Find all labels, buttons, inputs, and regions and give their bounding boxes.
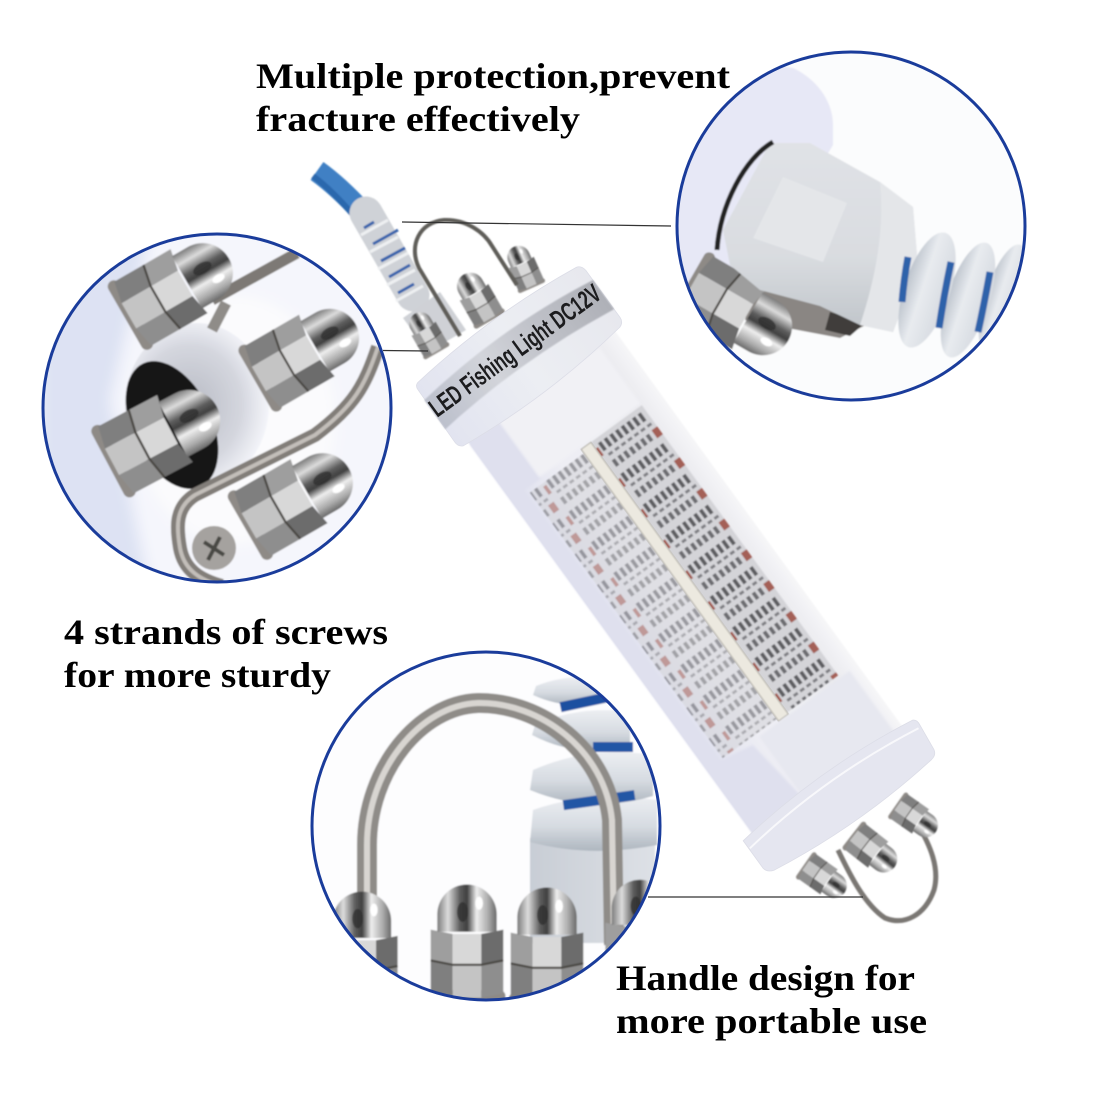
nuts bbox=[90, 242, 360, 561]
left facet bbox=[470, 407, 805, 836]
handle arch bbox=[367, 703, 614, 945]
nuts bbox=[334, 878, 648, 998]
heading: multiple protection: fracture effectively bbox=[256, 99, 580, 139]
panel: cable gland detail bbox=[660, 45, 1037, 405]
frosted lower section bbox=[759, 671, 894, 797]
icon: top handle bbox=[415, 220, 517, 336]
wire top bbox=[212, 253, 297, 330]
cap nut bbox=[688, 252, 793, 356]
leader line: screws bbox=[383, 350, 428, 352]
leader line: gland bbox=[402, 222, 671, 226]
screw head bbox=[192, 526, 236, 570]
left led board bbox=[530, 453, 777, 758]
panel: handle detail bbox=[308, 650, 677, 1007]
frosted upper section bbox=[498, 347, 641, 477]
right led board bbox=[591, 405, 838, 712]
cylinder bbox=[464, 328, 906, 840]
icon: power cable bbox=[313, 171, 466, 352]
heading: screws: 4 strands of screws bbox=[64, 612, 388, 652]
blue rings bbox=[902, 257, 990, 332]
plate shading bbox=[44, 250, 148, 566]
mounting plate bbox=[678, 67, 833, 283]
label band bbox=[420, 273, 614, 431]
icon: top nuts bbox=[402, 241, 546, 360]
recess bbox=[125, 323, 269, 487]
product label: LED Fishing Light DC12V bbox=[423, 278, 607, 423]
hex facet bbox=[754, 219, 840, 262]
strain relief bbox=[530, 677, 657, 943]
plate highlight bbox=[135, 295, 335, 545]
top cap bbox=[410, 259, 629, 452]
bottom handle and nuts bbox=[795, 792, 945, 921]
bottom cap lip bbox=[746, 721, 919, 850]
heading: screws bbox=[64, 612, 388, 695]
heading: handle: Handle design for bbox=[616, 958, 915, 998]
heading: multiple protection: Multiple protection,prevent bbox=[256, 56, 730, 96]
gland collar bbox=[860, 209, 916, 332]
wire main bbox=[178, 347, 378, 586]
gland body bbox=[723, 143, 882, 326]
lamp body bbox=[409, 257, 943, 881]
behind nut bbox=[745, 288, 866, 338]
heading: screws: for more sturdy bbox=[64, 655, 331, 695]
discs bbox=[898, 232, 1022, 358]
hole bbox=[124, 360, 220, 490]
heading: handle: more portable use bbox=[616, 1001, 927, 1041]
center strip bbox=[581, 442, 788, 721]
heading: handle bbox=[616, 958, 927, 1041]
bottom cap bbox=[739, 711, 943, 881]
o-ring bbox=[717, 142, 773, 250]
heading: multiple protection bbox=[256, 56, 730, 139]
leader line: handle bbox=[648, 896, 863, 898]
panel: screws detail bbox=[40, 224, 400, 590]
rear nut end bbox=[825, 312, 866, 336]
